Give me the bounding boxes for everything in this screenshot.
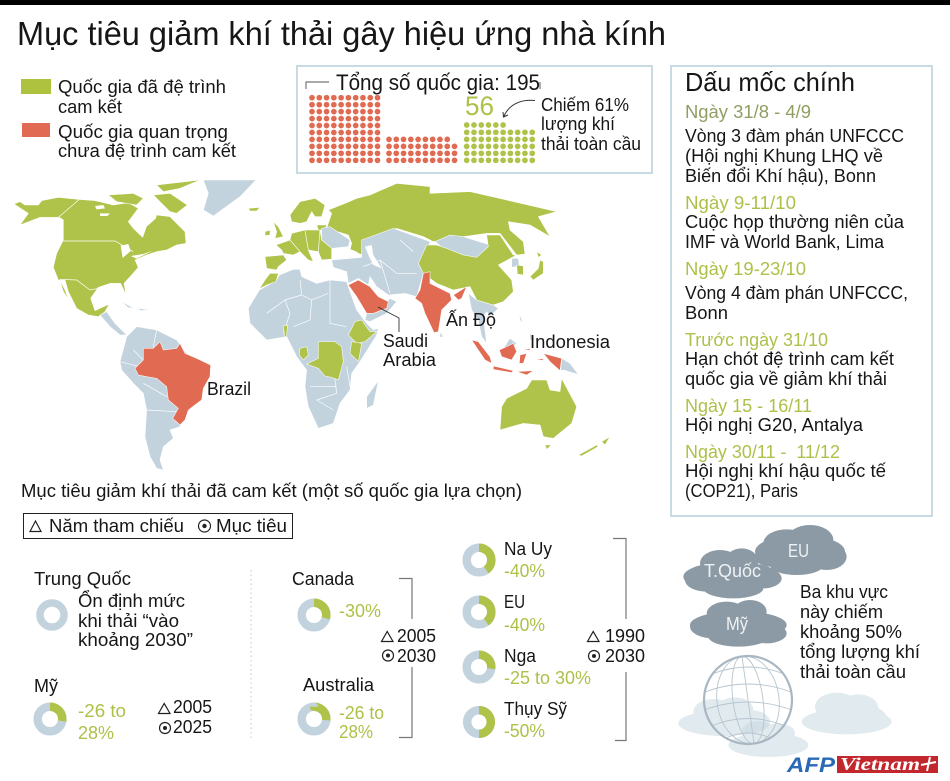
entry: Canada: Canada [292, 568, 355, 589]
entry: Switzerland: -50% [504, 720, 545, 741]
entry: Australia [302, 674, 384, 742]
panel: key milestones: Ngày 19-23/10 [685, 258, 806, 279]
panel: key milestones: Cuộc họp thường niên của [685, 211, 905, 232]
title: Mục tiêu giảm khí thải gây hiệu ứng nhà kính [17, 15, 666, 52]
illustration: dark clouds [683, 525, 847, 647]
map label: India: Ấn Độ [446, 309, 496, 330]
text: three regions share: khoảng 50% [800, 621, 902, 642]
text: three regions share: này chiếm [800, 601, 883, 622]
panel: key milestones: (Hội nghị Khung LHQ về [685, 145, 883, 166]
white seas and lakes [95, 205, 382, 268]
entry: Norway: Na Uy [504, 538, 553, 559]
cloud: China [683, 548, 782, 598]
text: three regions share: tổng lượng khí [800, 641, 921, 662]
panel: key milestones: Hội nghị khí hậu quốc tế [685, 460, 887, 481]
panel: key milestones: Ngày 15 - 16/11 [685, 395, 812, 416]
map label: Indonesia: Indonesia [530, 331, 611, 352]
dot chart: red countries [312, 98, 455, 160]
bracket: 1990 to 2030: 1990 [605, 625, 645, 646]
entry: Australia: -26 to [339, 702, 384, 723]
entry: Russia [467, 645, 591, 688]
map label: Saudi Arabia [378, 307, 437, 370]
world map [14, 180, 610, 470]
panel: key milestones: Vòng 3 đàm phán UNFCCC [685, 125, 904, 146]
legend: country status: chưa đệ trình cam kết [58, 140, 236, 161]
text: three regions share [800, 581, 921, 682]
bracket: 1990 to 2030 [588, 538, 645, 740]
panel: key milestones: Hội nghị G20, Antalya [685, 414, 864, 435]
legend: symbols [24, 514, 292, 538]
text: three regions share: thải toàn cầu [800, 661, 906, 682]
callout text [541, 94, 641, 154]
panel: key milestones: Dấu mốc chính [685, 67, 855, 97]
entry: EU: -40% [504, 614, 545, 635]
legend: country status: Quốc gia quan trọng [58, 121, 228, 142]
panel: key milestones: Hạn chót đệ trình cam kết [685, 348, 894, 369]
text: three regions share: Ba khu vực [800, 581, 888, 602]
logo: AFP Vietnam: AFP [786, 754, 836, 777]
entry: Switzerland: Thụy Sỹ [504, 698, 568, 719]
callout text: Chiếm 61% [541, 94, 629, 115]
panel: key milestones: Bonn [685, 302, 728, 323]
bracket: 2005 to 2030: 2030 [397, 645, 436, 666]
entry: Norway: -40% [504, 560, 545, 581]
entry: USA: 2005 [173, 696, 212, 717]
entry: USA: 28% [78, 722, 114, 743]
entry: Canada: -30% [339, 600, 381, 621]
entry: USA: Mỹ [34, 675, 59, 696]
entry: China [34, 568, 193, 650]
entry: Switzerland [467, 698, 568, 741]
legend: country status: Quốc gia đã đệ trình [58, 76, 226, 97]
entry: USA [34, 675, 212, 743]
panel: key milestones: Ngày 30/11 - 11/12 [685, 441, 840, 462]
entry: Canada [292, 568, 381, 627]
entry: China: khi thải “vào [78, 610, 179, 631]
panel: key milestones: (COP21), Paris [685, 480, 798, 501]
cloud labels: EU [788, 540, 809, 561]
bracket: 1990 to 2030: 2030 [605, 645, 645, 666]
legend: symbols: Mục tiêu [216, 515, 287, 536]
panel: key milestones: Trước ngày 31/10 [685, 329, 828, 350]
illustration: pale clouds [678, 693, 892, 757]
entry: Australia: Australia [303, 674, 375, 695]
entry: EU [467, 591, 545, 635]
arrow [503, 100, 535, 117]
entry: Russia: Nga [504, 645, 537, 666]
illustration: globe [704, 652, 792, 748]
cloud: USA [690, 600, 787, 647]
bracket: 2005 to 2030 [382, 578, 436, 738]
cloud labels [704, 540, 809, 634]
callout text: lượng khí [541, 113, 616, 134]
map label: Saudi Arabia: Arabia [383, 349, 437, 370]
cloud labels: Mỹ [726, 613, 749, 634]
map label: Saudi Arabia: Saudi [383, 330, 428, 351]
panel: key milestones: Ngày 31/8 - 4/9 [685, 101, 811, 122]
logo: AFP Vietnam: Vietnam [840, 754, 920, 774]
panel: key milestones: IMF và World Bank, Lima [685, 231, 885, 252]
dot chart: green countries [467, 125, 533, 160]
entry: USA: -26 to [78, 700, 126, 721]
legend: country status [21, 76, 236, 161]
panel: key milestones: Ngày 9-11/10 [685, 192, 796, 213]
panel: key milestones [671, 66, 932, 516]
entry: Russia: -25 to 30% [504, 667, 591, 688]
heading: committed targets: Mục tiêu giảm khí thải đã cam kết (một số quốc gia lựa chọn) [21, 480, 522, 501]
map label: Brazil: Brazil [207, 378, 251, 399]
panel: key milestones: quốc gia về giảm khí thải [685, 368, 887, 389]
cloud labels: T.Quốc [704, 560, 761, 581]
callout text: thải toàn cầu [541, 133, 641, 154]
cloud: EU [755, 525, 847, 575]
legend: country status: cam kết [58, 96, 122, 117]
entry: China: Ổn định mức [78, 590, 185, 611]
logo: AFP Vietnam [786, 754, 938, 777]
panel: key milestones: Biến đổi Khí hậu), Bonn [685, 165, 876, 186]
entry: China: Trung Quốc [34, 568, 131, 589]
panel: country count [297, 66, 652, 173]
Greenland, Central America, Caribbean [100, 180, 578, 470]
panel: key milestones: Vòng 4 đàm phán UNFCCC, [685, 282, 908, 303]
count: 56: 56 [465, 91, 494, 121]
entry: Norway [467, 538, 553, 581]
legend: symbols: Năm tham chiếu [49, 515, 184, 536]
panel: country count: Tổng số quốc gia: 195 [336, 70, 540, 95]
entry: USA: 2025 [173, 716, 212, 737]
entry: EU: EU [504, 591, 525, 612]
entry: Australia: 28% [339, 721, 373, 742]
bracket: 2005 to 2030: 2005 [397, 625, 436, 646]
entry: China: khoảng 2030” [78, 629, 193, 650]
